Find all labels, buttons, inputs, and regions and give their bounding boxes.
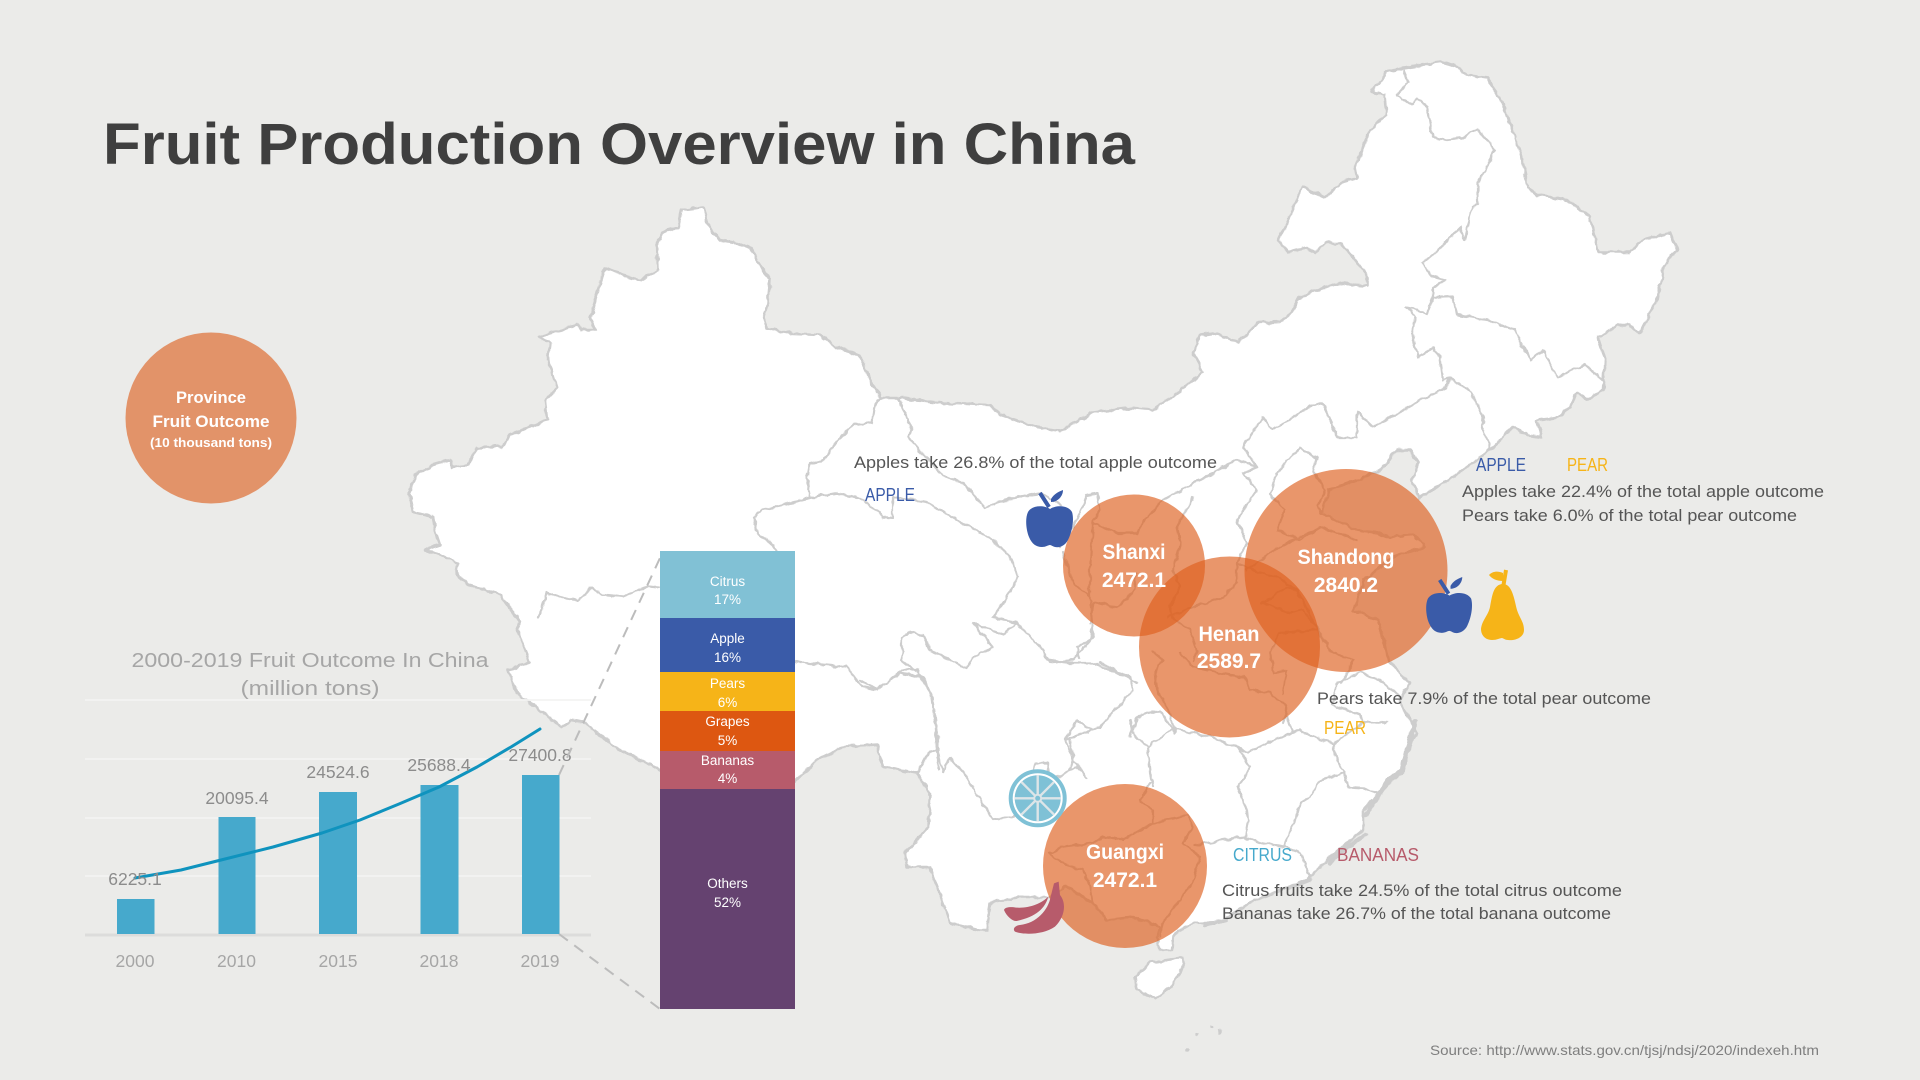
chart title: (million tons) bbox=[240, 678, 380, 700]
stacked bar: Others bbox=[707, 876, 748, 891]
value labels: 6225.1 bbox=[108, 869, 162, 889]
value labels bbox=[108, 745, 572, 889]
callout: Shandong apple and pear: Pears take 6.0% of the total pear outcome bbox=[1462, 507, 1797, 525]
province labels: 2589.7 bbox=[1197, 650, 1261, 673]
callout: Guangxi: BANANAS bbox=[1337, 845, 1419, 865]
icon: pear bbox=[1481, 570, 1524, 640]
province labels: Shandong bbox=[1298, 546, 1394, 569]
year labels: 2000 bbox=[116, 951, 155, 971]
province circles bbox=[1043, 469, 1448, 948]
callout: Guangxi: Citrus fruits take 24.5% of the total citrus outcome bbox=[1222, 882, 1622, 900]
stacked bar bbox=[660, 551, 795, 1009]
chart title: 2000-2019 Fruit Outcome In China bbox=[132, 650, 490, 672]
callout: Shanxi: Apples take 26.8% of the total apple outcome bbox=[854, 454, 1217, 472]
map: Hainan island bbox=[1135, 958, 1183, 998]
province labels: 2472.1 bbox=[1093, 869, 1157, 892]
stacked bar: 52% bbox=[714, 895, 741, 910]
title: Fruit Production Overview in China bbox=[103, 112, 1136, 177]
stacked bar: Bananas bbox=[701, 753, 754, 768]
icon: apple Shandong bbox=[1426, 577, 1472, 633]
stacked bar: 16% bbox=[714, 650, 741, 665]
bar and line chart bbox=[85, 650, 591, 971]
year labels: 2015 bbox=[319, 951, 357, 971]
circle: Henan bbox=[1139, 556, 1320, 738]
callout: Shandong apple and pear: Apples take 22.4% of the total apple outcome bbox=[1462, 483, 1824, 501]
province labels: 2840.2 bbox=[1314, 574, 1378, 597]
icon: apple Shanxi bbox=[1026, 490, 1073, 547]
year labels: 2010 bbox=[217, 951, 256, 971]
stacked bar: Citrus bbox=[710, 574, 745, 589]
circle: Shanxi bbox=[1063, 494, 1205, 636]
callout: Henan: PEAR bbox=[1324, 718, 1366, 738]
province labels: Henan bbox=[1198, 623, 1260, 646]
value labels: 24524.6 bbox=[306, 762, 370, 782]
stacked bar: Apple bbox=[710, 631, 745, 646]
value labels: 25688.4 bbox=[407, 755, 471, 775]
map: South China Sea dots bbox=[1186, 1025, 1222, 1053]
legend circle: (10 thousand tons) bbox=[150, 435, 272, 450]
stacked bar: 5% bbox=[718, 733, 737, 748]
stacked bar: Pears bbox=[710, 676, 745, 691]
callout: Guangxi: CITRUS bbox=[1233, 845, 1292, 865]
stacked bar: 6% bbox=[718, 695, 737, 710]
province labels: 2472.1 bbox=[1102, 569, 1166, 592]
callout: Henan bbox=[1317, 690, 1651, 738]
stacked bar: 4% bbox=[718, 771, 737, 786]
year labels: 2018 bbox=[420, 951, 458, 971]
circle: Guangxi bbox=[1043, 784, 1207, 948]
province labels: Shanxi bbox=[1102, 541, 1166, 564]
value labels: 20095.4 bbox=[205, 788, 269, 808]
stacked bar: 17% bbox=[714, 592, 741, 607]
trend line bbox=[135, 729, 540, 878]
callout: Henan: Pears take 7.9% of the total pear outcome bbox=[1317, 690, 1651, 708]
year labels bbox=[116, 951, 559, 971]
province labels: Guangxi bbox=[1086, 841, 1164, 864]
chart title bbox=[132, 650, 490, 700]
bars bbox=[117, 775, 560, 934]
province labels bbox=[1086, 541, 1394, 892]
year labels: 2019 bbox=[521, 951, 559, 971]
circle: Shandong bbox=[1244, 469, 1448, 672]
stacked bar: Grapes bbox=[705, 714, 750, 729]
map: national outline bbox=[409, 62, 1677, 950]
callout: Shanxi: APPLE bbox=[865, 485, 915, 505]
map: province borders bbox=[538, 70, 1603, 937]
icon: bananas bbox=[1004, 882, 1064, 934]
callout: Guangxi: Bananas take 26.7% of the total banana outcome bbox=[1222, 905, 1611, 923]
value labels: 27400.8 bbox=[508, 745, 572, 765]
map of China bbox=[409, 62, 1677, 1053]
legend circle: Fruit Outcome bbox=[152, 413, 270, 431]
callout: Shandong apple and pear bbox=[1462, 455, 1824, 525]
callout: Shandong apple and pear: PEAR bbox=[1567, 455, 1608, 475]
source note: Source: http://www.stats.gov.cn/tjsj/ndsj/2020/indexeh.htm bbox=[1430, 1042, 1819, 1058]
callout: Shanxi bbox=[854, 454, 1217, 505]
legend circle: Province bbox=[176, 389, 246, 407]
dashed connector lines bbox=[559, 558, 660, 1009]
callout: Guangxi bbox=[1222, 845, 1622, 923]
map: coastal islands bbox=[1205, 722, 1415, 925]
callout: Shandong apple and pear: APPLE bbox=[1476, 455, 1526, 475]
legend circle bbox=[126, 332, 296, 504]
icon: citrus slice bbox=[1011, 771, 1065, 825]
